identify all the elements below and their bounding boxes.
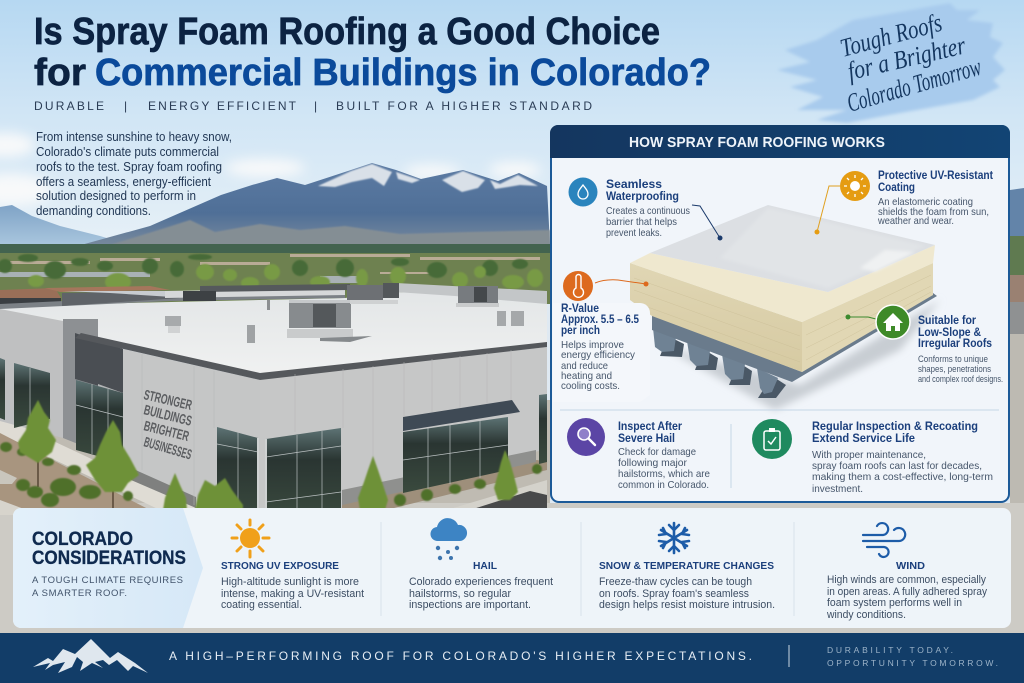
intro paragraph: demanding conditions.: [36, 203, 151, 218]
window mullions: [30, 368, 508, 519]
callout: R-value: energy efficiency: [561, 349, 636, 361]
slogan: [837, 8, 985, 118]
consideration: hail: Colorado experiences frequent: [409, 576, 553, 588]
title: Commercial Buildings in Colorado?: [95, 52, 711, 94]
callout: inspect after severe hail: common in Colorado.: [618, 479, 709, 491]
callout: regular inspection and recoating: spray foam roofs can last for decades,: [812, 460, 982, 472]
sign: Stronger Buildings Brighter Businesses: BUILDINGS: [142, 401, 194, 429]
callout: inspect after severe hail: following major: [618, 457, 687, 469]
consideration: wind: foam system performs well in: [827, 597, 962, 609]
callout: low-slope and irregular roofs: Suitable for: [918, 313, 976, 327]
sign: Stronger Buildings Brighter Businesses: [142, 386, 194, 462]
callout: low-slope and irregular roofs: [846, 305, 1003, 385]
awning: [403, 400, 520, 431]
callout: regular inspection and recoating: Regular Inspection & Recoating: [812, 419, 978, 433]
callout: R-value: per inch: [561, 323, 600, 337]
consideration: wind: windy conditions.: [826, 609, 906, 621]
footer secondary message: [827, 645, 998, 668]
subtitle strapline: BUILT FOR A HIGHER STANDARD: [336, 99, 592, 113]
subtitle strapline: |: [314, 99, 317, 113]
roof cross-section diagram: [630, 205, 940, 410]
callout: seamless waterproofing: Creates a continuous: [606, 205, 690, 217]
consideration: snow and temperature changes: SNOW & TEMPERATURE CHANGES: [599, 560, 774, 572]
intro paragraph: From intense sunshine to heavy snow,: [36, 129, 232, 144]
callout: low-slope and irregular roofs: shapes, penetrations: [918, 364, 991, 375]
callout: low-slope and irregular roofs: Irregular Roofs: [918, 336, 992, 350]
callout: regular inspection and recoating: [752, 419, 993, 495]
clouds: [0, 133, 541, 206]
callout: inspect after severe hail: [567, 418, 710, 491]
rooftop HVAC units: [165, 283, 524, 343]
consideration: strong UV exposure: intense, making a UV-resistant: [221, 588, 364, 600]
section heading: CONSIDERATIONS: [32, 548, 186, 569]
mountains: [0, 163, 1024, 245]
windows: [0, 358, 547, 519]
landscaping trees and shrubs: [0, 400, 542, 510]
section heading: [32, 529, 186, 599]
callout: protective UV-resistant coating: [814, 168, 993, 234]
callout: regular inspection and recoating: investment.: [812, 483, 863, 495]
consideration: snow and temperature changes: design helps resist moisture intrusion.: [599, 599, 775, 611]
consideration: strong UV exposure: STRONG UV EXPOSURE: [221, 560, 339, 572]
distant tree line and town: [0, 236, 1024, 306]
callout: protective UV-resistant coating: Protective UV-Resistant: [878, 168, 993, 182]
panel: Colorado considerations: [13, 508, 1011, 628]
consideration: hail: [409, 518, 553, 611]
subtitle strapline: [34, 99, 592, 113]
callout: seamless waterproofing: Waterproofing: [606, 189, 679, 203]
consideration: hail: inspections are important.: [409, 599, 531, 611]
callout: protective UV-resistant coating: shields the foam from sun,: [878, 206, 989, 218]
consideration: strong UV exposure: [221, 520, 364, 611]
wall panel seams: [142, 350, 511, 505]
building: [0, 283, 547, 519]
callout: R-value: cooling costs.: [561, 380, 620, 392]
callout: R-value: and reduce: [561, 360, 608, 372]
callout: protective UV-resistant coating: An elastomeric coating: [878, 196, 973, 208]
consideration: strong UV exposure: coating essential.: [221, 599, 302, 611]
callout: seamless waterproofing: [568, 177, 722, 240]
callout: seamless waterproofing: Seamless: [606, 177, 662, 191]
intro paragraph: [36, 129, 232, 218]
intro paragraph: offers a seamless, energy-efficient: [36, 174, 211, 189]
callout: regular inspection and recoating: making them a cost-effective, long-term: [812, 471, 993, 483]
consideration: wind: in open areas. A fully adhered spray: [827, 586, 987, 598]
callout: R-value: Approx. 5.5 – 6.5: [561, 312, 639, 326]
callout: R-value: R-Value: [561, 301, 599, 315]
consideration: hail: hailstorms, so regular: [409, 588, 511, 600]
title: [34, 11, 711, 94]
intro paragraph: solution designed to perform in: [36, 188, 196, 203]
callout: regular inspection and recoating: With proper maintenance,: [812, 449, 926, 461]
section heading: A TOUGH CLIMATE REQUIRES: [32, 575, 183, 586]
ground: [0, 302, 1024, 635]
footer secondary message: OPPORTUNITY TOMORROW.: [827, 658, 998, 668]
panel heading: HOW SPRAY FOAM ROOFING WORKS: [629, 135, 885, 151]
subtitle strapline: DURABLE: [34, 99, 104, 113]
callout: R-value: [553, 271, 650, 402]
callout: protective UV-resistant coating: Coating: [878, 180, 915, 194]
consideration: wind: [826, 523, 987, 621]
consideration: wind: WIND: [896, 560, 925, 572]
sign: Stronger Buildings Brighter Businesses: BRIGHTER: [142, 417, 191, 444]
callout: low-slope and irregular roofs: Conforms to unique: [918, 354, 988, 365]
callout: protective UV-resistant coating: weather and wear.: [877, 215, 954, 227]
callout: regular inspection and recoating: Extend Service Life: [812, 431, 915, 445]
callout: R-value: heating and: [561, 370, 612, 382]
consideration: snow and temperature changes: on roofs. Spray foam's seamless: [599, 588, 749, 600]
title: for: [34, 52, 86, 94]
callout: seamless waterproofing: prevent leaks.: [606, 227, 662, 239]
callout: inspect after severe hail: hailstorms, which are: [618, 468, 710, 480]
section heading: COLORADO: [32, 529, 133, 550]
footer secondary message: DURABILITY TODAY.: [827, 645, 953, 655]
callout: seamless waterproofing: barrier that helps: [606, 216, 677, 228]
consideration: strong UV exposure: High-altitude sunlight is more: [221, 576, 359, 588]
panel: how spray foam roofing works: [550, 125, 1010, 502]
subtitle strapline: |: [124, 99, 127, 113]
sign: Stronger Buildings Brighter Businesses: BUSINESSES: [142, 434, 194, 462]
callout: R-value: Helps improve: [561, 339, 624, 351]
title: Is Spray Foam Roofing a Good Choice: [34, 11, 660, 53]
callout: low-slope and irregular roofs: Low-Slope &: [918, 325, 981, 339]
callout: inspect after severe hail: Severe Hail: [618, 431, 675, 445]
sign: Stronger Buildings Brighter Businesses: STRONGER: [142, 386, 194, 413]
slogan: Tough Roofs: [837, 8, 945, 63]
brush stroke badge: [777, 3, 1005, 123]
icon: mountain logo: [33, 639, 148, 673]
footer band: [0, 633, 1024, 683]
consideration: snow and temperature changes: [599, 523, 775, 611]
footer tagline: A HIGH–PERFORMING ROOF FOR COLORADO'S HIGHER EXPECTATIONS.: [169, 649, 752, 663]
intro paragraph: roofs to the test. Spray foam roofing: [36, 159, 222, 174]
slogan: for a Brighter: [845, 30, 969, 86]
subtitle strapline: ENERGY EFFICIENT: [148, 99, 297, 113]
intro paragraph: Colorado's climate puts commercial: [36, 144, 219, 159]
consideration: hail: HAIL: [473, 560, 498, 572]
section heading: A SMARTER ROOF.: [32, 588, 127, 599]
callout: inspect after severe hail: Inspect After: [618, 419, 682, 433]
callout: inspect after severe hail: Check for damage: [618, 446, 696, 458]
consideration: wind: High winds are common, especially: [827, 574, 986, 586]
consideration: snow and temperature changes: Freeze-thaw cycles can be tough: [599, 576, 752, 588]
